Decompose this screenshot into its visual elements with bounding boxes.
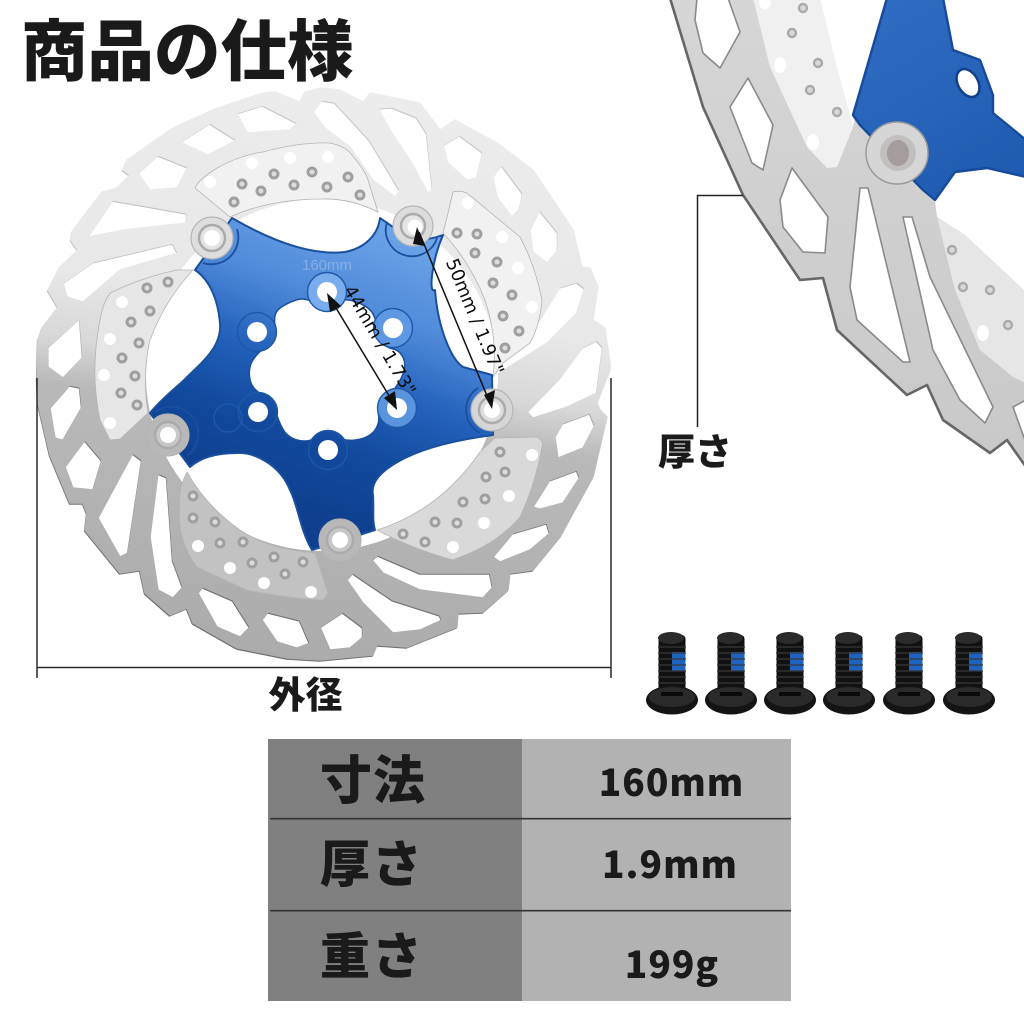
brake track segments (95, 143, 542, 600)
arrow: 44mm hole spacing: 44mm / 1.73" (339, 282, 420, 399)
rotor centre opening (146, 199, 498, 551)
washers (147, 206, 513, 561)
label: thickness: 厚さ (658, 422, 732, 476)
spider mounting holes (238, 272, 416, 470)
table label column (268, 739, 522, 1001)
engraved logo (214, 404, 242, 432)
close-up upper track (753, 0, 853, 168)
specification table (268, 739, 791, 1001)
close-up inner openings (820, 0, 887, 127)
bolt 4 (823, 632, 875, 714)
thickness leader line (698, 196, 743, 427)
bolt 5 (883, 632, 935, 714)
table value column (522, 739, 791, 1001)
bolt 2 (705, 632, 757, 714)
outer diameter dimension lines (37, 378, 611, 678)
row: thickness (320, 825, 738, 897)
arrow: 50mm bolt spacing (413, 227, 508, 409)
row: size (320, 739, 744, 814)
rotor ring with vents (36, 88, 610, 661)
close-up lower track (937, 217, 1024, 383)
arrow: 50mm bolt spacing: 50mm / 1.97" (441, 256, 508, 378)
close-up track holes (759, 0, 1012, 341)
row: weight (320, 917, 719, 989)
close-up vents (695, 0, 1024, 443)
row: weight: 重さ (320, 917, 424, 989)
row: thickness: 厚さ (320, 825, 424, 897)
label: outer diameter: 外径 (268, 665, 342, 719)
row: size: 160mm (599, 753, 744, 807)
row: size: 寸法 (320, 739, 426, 814)
close-up spider (853, 0, 1024, 200)
rotor edge close-up (670, 0, 1024, 467)
blue spider carrier (150, 218, 493, 550)
row: weight: 199g (625, 935, 719, 989)
brake rotor diagram (36, 88, 610, 661)
title: 商品の仕様 (21, 0, 354, 95)
bolt 6 (943, 632, 995, 714)
through holes (98, 151, 538, 598)
bolt 1 (646, 632, 698, 714)
spider bolt recess outlines (155, 222, 480, 456)
dimples (117, 168, 523, 578)
bolt 3 (764, 632, 816, 714)
row: thickness: 1.9mm (602, 835, 738, 889)
close-up washer (866, 122, 928, 184)
close-up spider hole (952, 65, 984, 101)
mounting bolts (646, 632, 995, 714)
engraved size: 160mm (302, 257, 352, 274)
spider centre opening (249, 299, 405, 441)
close-up rotor body (670, 0, 1024, 467)
